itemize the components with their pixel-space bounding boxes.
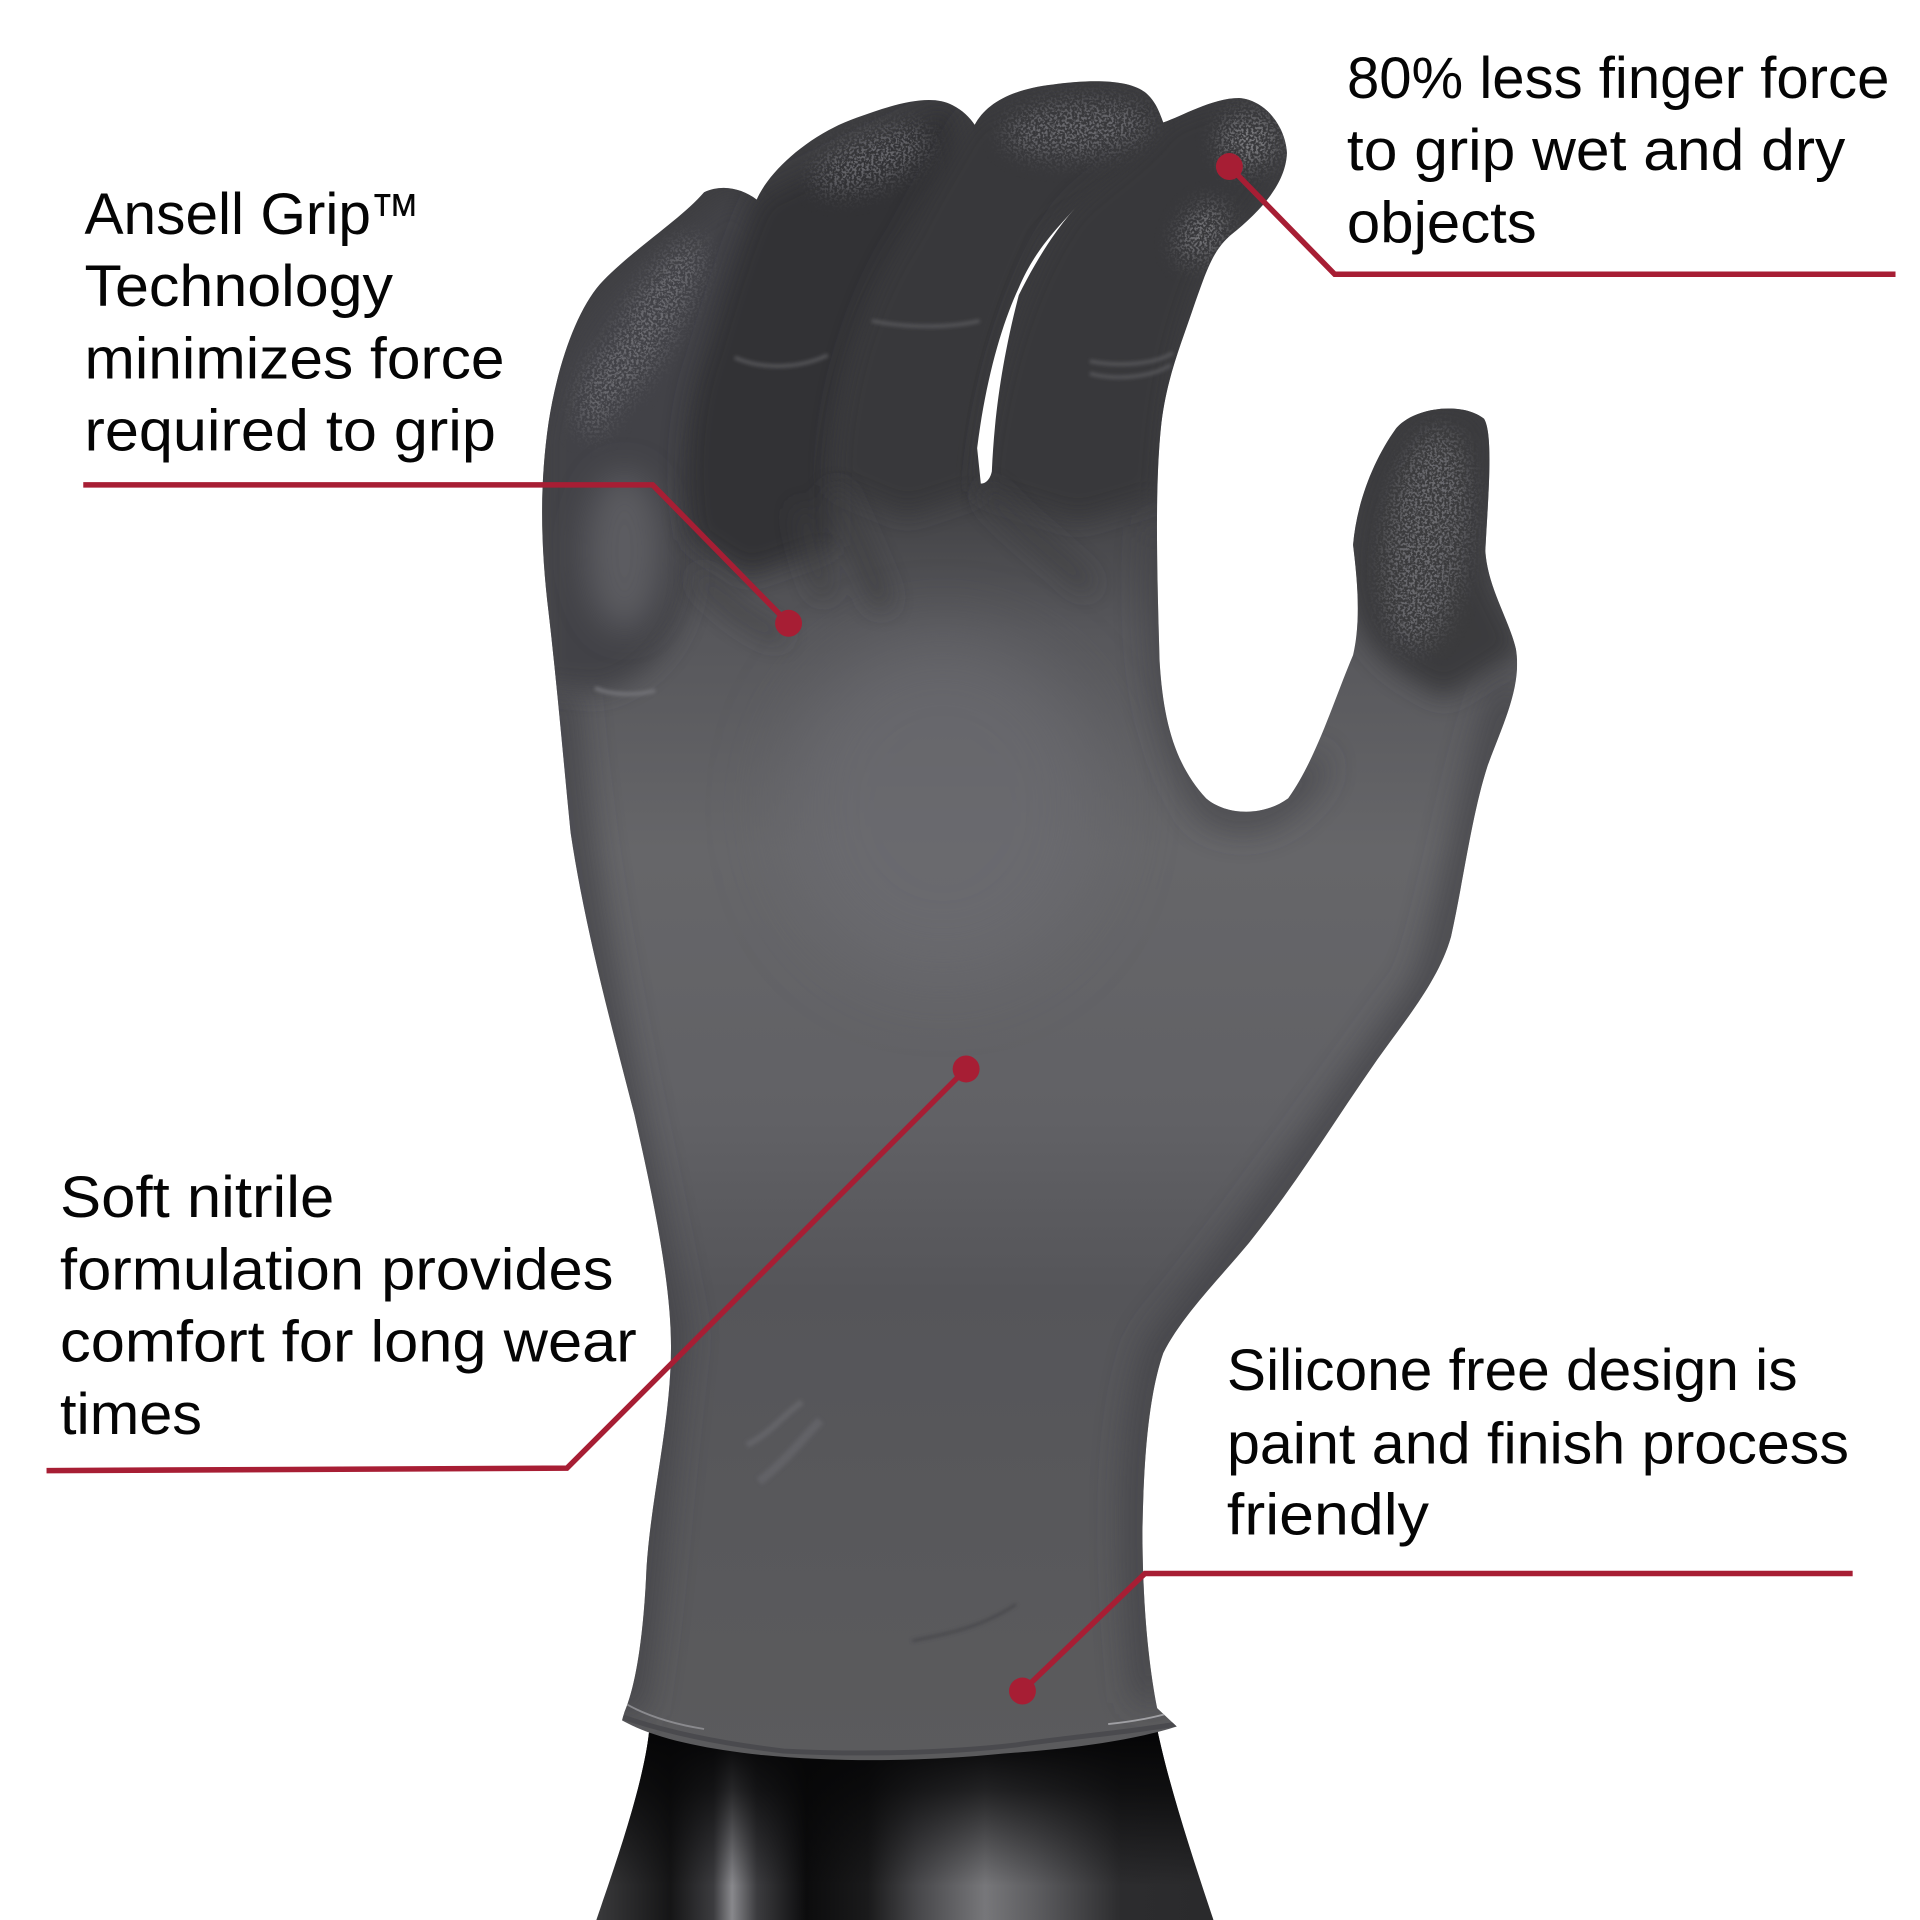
text: Ansell Grip bbox=[84, 182, 504, 464]
text: Ansell Grip: Ansell Grip bbox=[84, 182, 371, 247]
glove palm highlight bbox=[829, 646, 1060, 786]
callout: finger force bbox=[1216, 46, 1896, 274]
text: finger force: 80% less finger force bbox=[1347, 46, 1889, 111]
text: soft nitrile: formulation provides bbox=[60, 1237, 613, 1302]
callout: silicone free bbox=[1009, 1338, 1853, 1704]
text: Ansell Grip: ™ bbox=[370, 182, 420, 247]
grip texture highlights bbox=[572, 95, 1481, 653]
middle finger bbox=[833, 85, 1163, 514]
text: silicone free: Silicone free design is bbox=[1227, 1338, 1798, 1403]
finger creases and webbing bbox=[595, 321, 1173, 694]
text: silicone free: friendly bbox=[1227, 1482, 1429, 1547]
text: Ansell Grip: minimizes force bbox=[84, 326, 504, 391]
glove bbox=[527, 61, 1543, 1776]
text: soft nitrile: comfort for long wear bbox=[60, 1310, 637, 1375]
wrist wrinkles bbox=[747, 1402, 1016, 1641]
pinky finger bbox=[542, 188, 750, 696]
gap between middle and index fingers bbox=[977, 208, 1075, 484]
leader line bbox=[1009, 1573, 1853, 1704]
glove cuff bbox=[622, 1717, 1177, 1753]
text: soft nitrile: Soft nitrile bbox=[60, 1165, 334, 1230]
leader line bbox=[1216, 153, 1896, 274]
glove edge shading bbox=[557, 527, 1512, 1714]
ring finger bbox=[685, 104, 967, 576]
text: finger force: objects bbox=[1347, 190, 1537, 255]
leader line bbox=[83, 485, 802, 637]
text: silicone free: paint and finish process bbox=[1227, 1411, 1849, 1476]
text: silicone free bbox=[1227, 1338, 1849, 1547]
text: finger force: to grip wet and dry bbox=[1347, 118, 1845, 183]
thumb bbox=[1347, 400, 1524, 698]
mannequin arm bbox=[588, 1720, 1224, 1920]
text: finger force bbox=[1347, 46, 1889, 255]
index finger bbox=[980, 101, 1282, 520]
leader line bbox=[47, 1056, 980, 1471]
callout: Ansell Grip Technology bbox=[83, 182, 802, 637]
text: soft nitrile: times bbox=[60, 1382, 202, 1447]
text: soft nitrile bbox=[60, 1165, 637, 1447]
text: Ansell Grip: required to grip bbox=[84, 399, 496, 464]
text: Ansell Grip: Technology bbox=[84, 254, 393, 319]
callout: soft nitrile bbox=[47, 1056, 980, 1471]
